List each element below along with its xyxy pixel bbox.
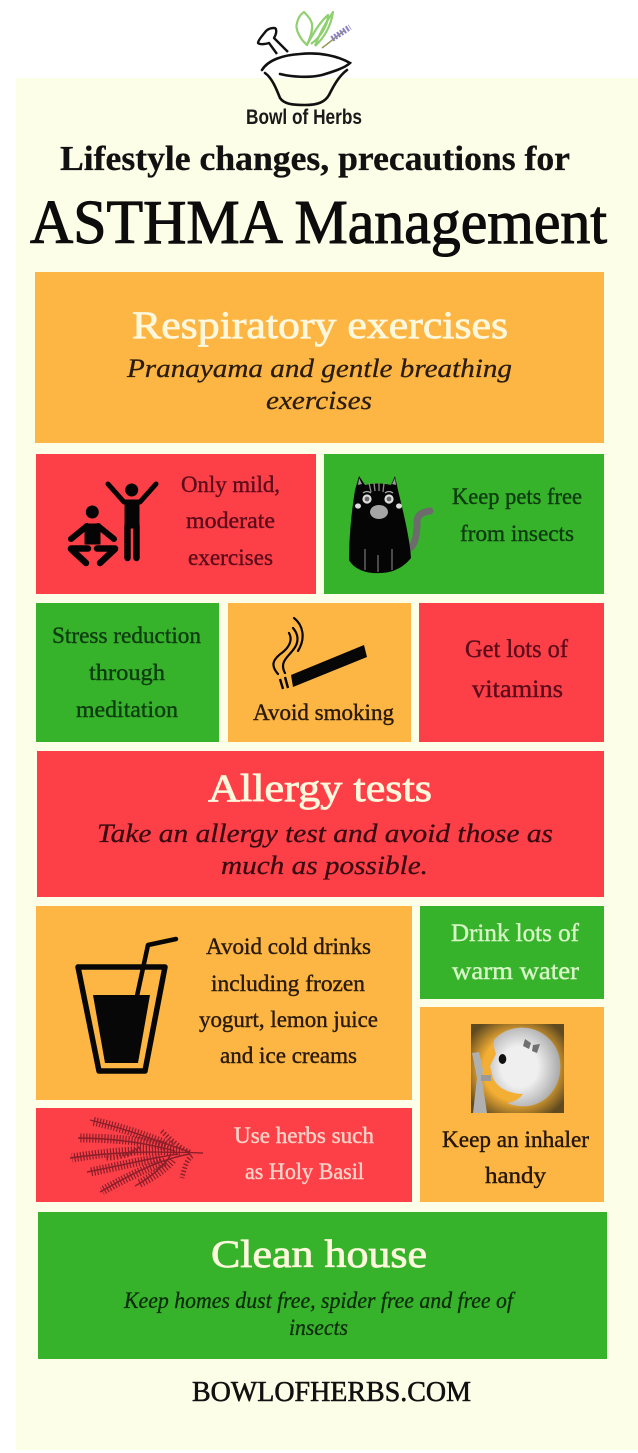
icon: cigarette xyxy=(273,618,367,689)
text: get lots of vitamins: vitamins xyxy=(472,676,563,703)
text: use herbs such as holy basil: Use herbs such xyxy=(234,1123,374,1148)
text: stress reduction through meditation: Stress reduction xyxy=(52,623,201,648)
text: breathing exercises: Pranayama and gentle breathing xyxy=(126,354,512,383)
text: only mild, moderate exercises: exercises xyxy=(188,545,273,570)
panel: holy basil xyxy=(36,1108,412,1202)
icon: pestle xyxy=(258,28,288,54)
text: keep pets free from insects xyxy=(452,484,582,546)
logo wordmark: Bowl of Herbs xyxy=(246,106,362,129)
icon: black cat xyxy=(349,476,430,573)
text: keep pets free from insects: Keep pets free xyxy=(452,484,582,509)
text: drink lots of warm water xyxy=(451,920,580,985)
panel: pets xyxy=(324,454,604,594)
panel: vitamins xyxy=(419,603,604,742)
icon: leaves xyxy=(296,12,333,46)
text: clean house advice xyxy=(123,1288,516,1340)
text: keep an inhaler handy xyxy=(442,1127,589,1188)
panel: stress reduction xyxy=(36,603,219,742)
text: avoid cold drinks: yogurt, lemon juice xyxy=(199,1007,378,1032)
logo: Bowl of Herbs xyxy=(246,12,362,129)
panel: cold drinks xyxy=(36,906,412,1100)
icon: child using inhaler xyxy=(471,1024,564,1113)
text: avoid smoking: Avoid smoking xyxy=(253,700,394,725)
text: stress reduction through meditation xyxy=(52,623,201,722)
heading: respiratory exercises: Respiratory exercises xyxy=(132,304,508,347)
footer: website: BOWLOFHERBS.COM xyxy=(192,1376,471,1408)
text: avoid cold drinks xyxy=(199,934,378,1068)
text: avoid cold drinks: including frozen xyxy=(211,971,365,996)
heading: allergy tests: Allergy tests xyxy=(208,767,432,810)
panel: mild exercises xyxy=(36,454,316,594)
title line 2: ASTHMA Management xyxy=(30,189,607,257)
text: avoid cold drinks: Avoid cold drinks xyxy=(206,934,371,959)
text: keep an inhaler handy: handy xyxy=(485,1163,547,1188)
panel: clean house xyxy=(38,1212,607,1359)
heading: clean house: Clean house xyxy=(211,1233,427,1276)
icon: lavender sprig xyxy=(322,27,350,48)
icon: herb branch xyxy=(70,1120,203,1192)
panel: inhaler xyxy=(420,1007,604,1202)
icon: mortar bowl xyxy=(262,53,350,105)
text: breathing exercises xyxy=(126,354,512,415)
text: allergy test advice: much as possible. xyxy=(221,851,428,880)
text: get lots of vitamins xyxy=(465,636,569,703)
icon: glass with straw xyxy=(78,939,176,1071)
text: drink lots of warm water: warm water xyxy=(452,958,580,985)
panel: warm water xyxy=(420,906,604,999)
text: only mild, moderate exercises: Only mild, xyxy=(181,472,280,497)
panel: avoid smoking xyxy=(228,603,411,742)
text: avoid cold drinks: and ice creams xyxy=(220,1043,357,1068)
panel: respiratory exercises xyxy=(35,272,604,443)
text: only mild, moderate exercises xyxy=(181,472,280,570)
text: clean house advice: insects xyxy=(289,1315,348,1340)
text: only mild, moderate exercises: moderate xyxy=(186,508,275,533)
text: allergy test advice xyxy=(97,819,553,880)
text: get lots of vitamins: Get lots of xyxy=(465,636,569,663)
text: breathing exercises: exercises xyxy=(266,386,372,415)
icon: exercising figures xyxy=(71,484,156,563)
text: stress reduction through meditation: meditation xyxy=(76,697,179,722)
text: use herbs such as holy basil xyxy=(234,1123,374,1184)
panel: allergy tests xyxy=(37,751,604,897)
text: clean house advice: Keep homes dust free, spider free and free of xyxy=(123,1288,516,1313)
text: keep pets free from insects: from insects xyxy=(460,521,574,546)
text: drink lots of warm water: Drink lots of xyxy=(451,920,580,947)
text: use herbs such as holy basil: as Holy Basil xyxy=(245,1159,364,1184)
title line 1: Lifestyle changes, precautions for xyxy=(60,139,570,178)
text: allergy test advice: Take an allergy test and avoid those as xyxy=(97,819,553,848)
text: stress reduction through meditation: through xyxy=(89,660,166,685)
text: keep an inhaler handy: Keep an inhaler xyxy=(442,1127,589,1152)
